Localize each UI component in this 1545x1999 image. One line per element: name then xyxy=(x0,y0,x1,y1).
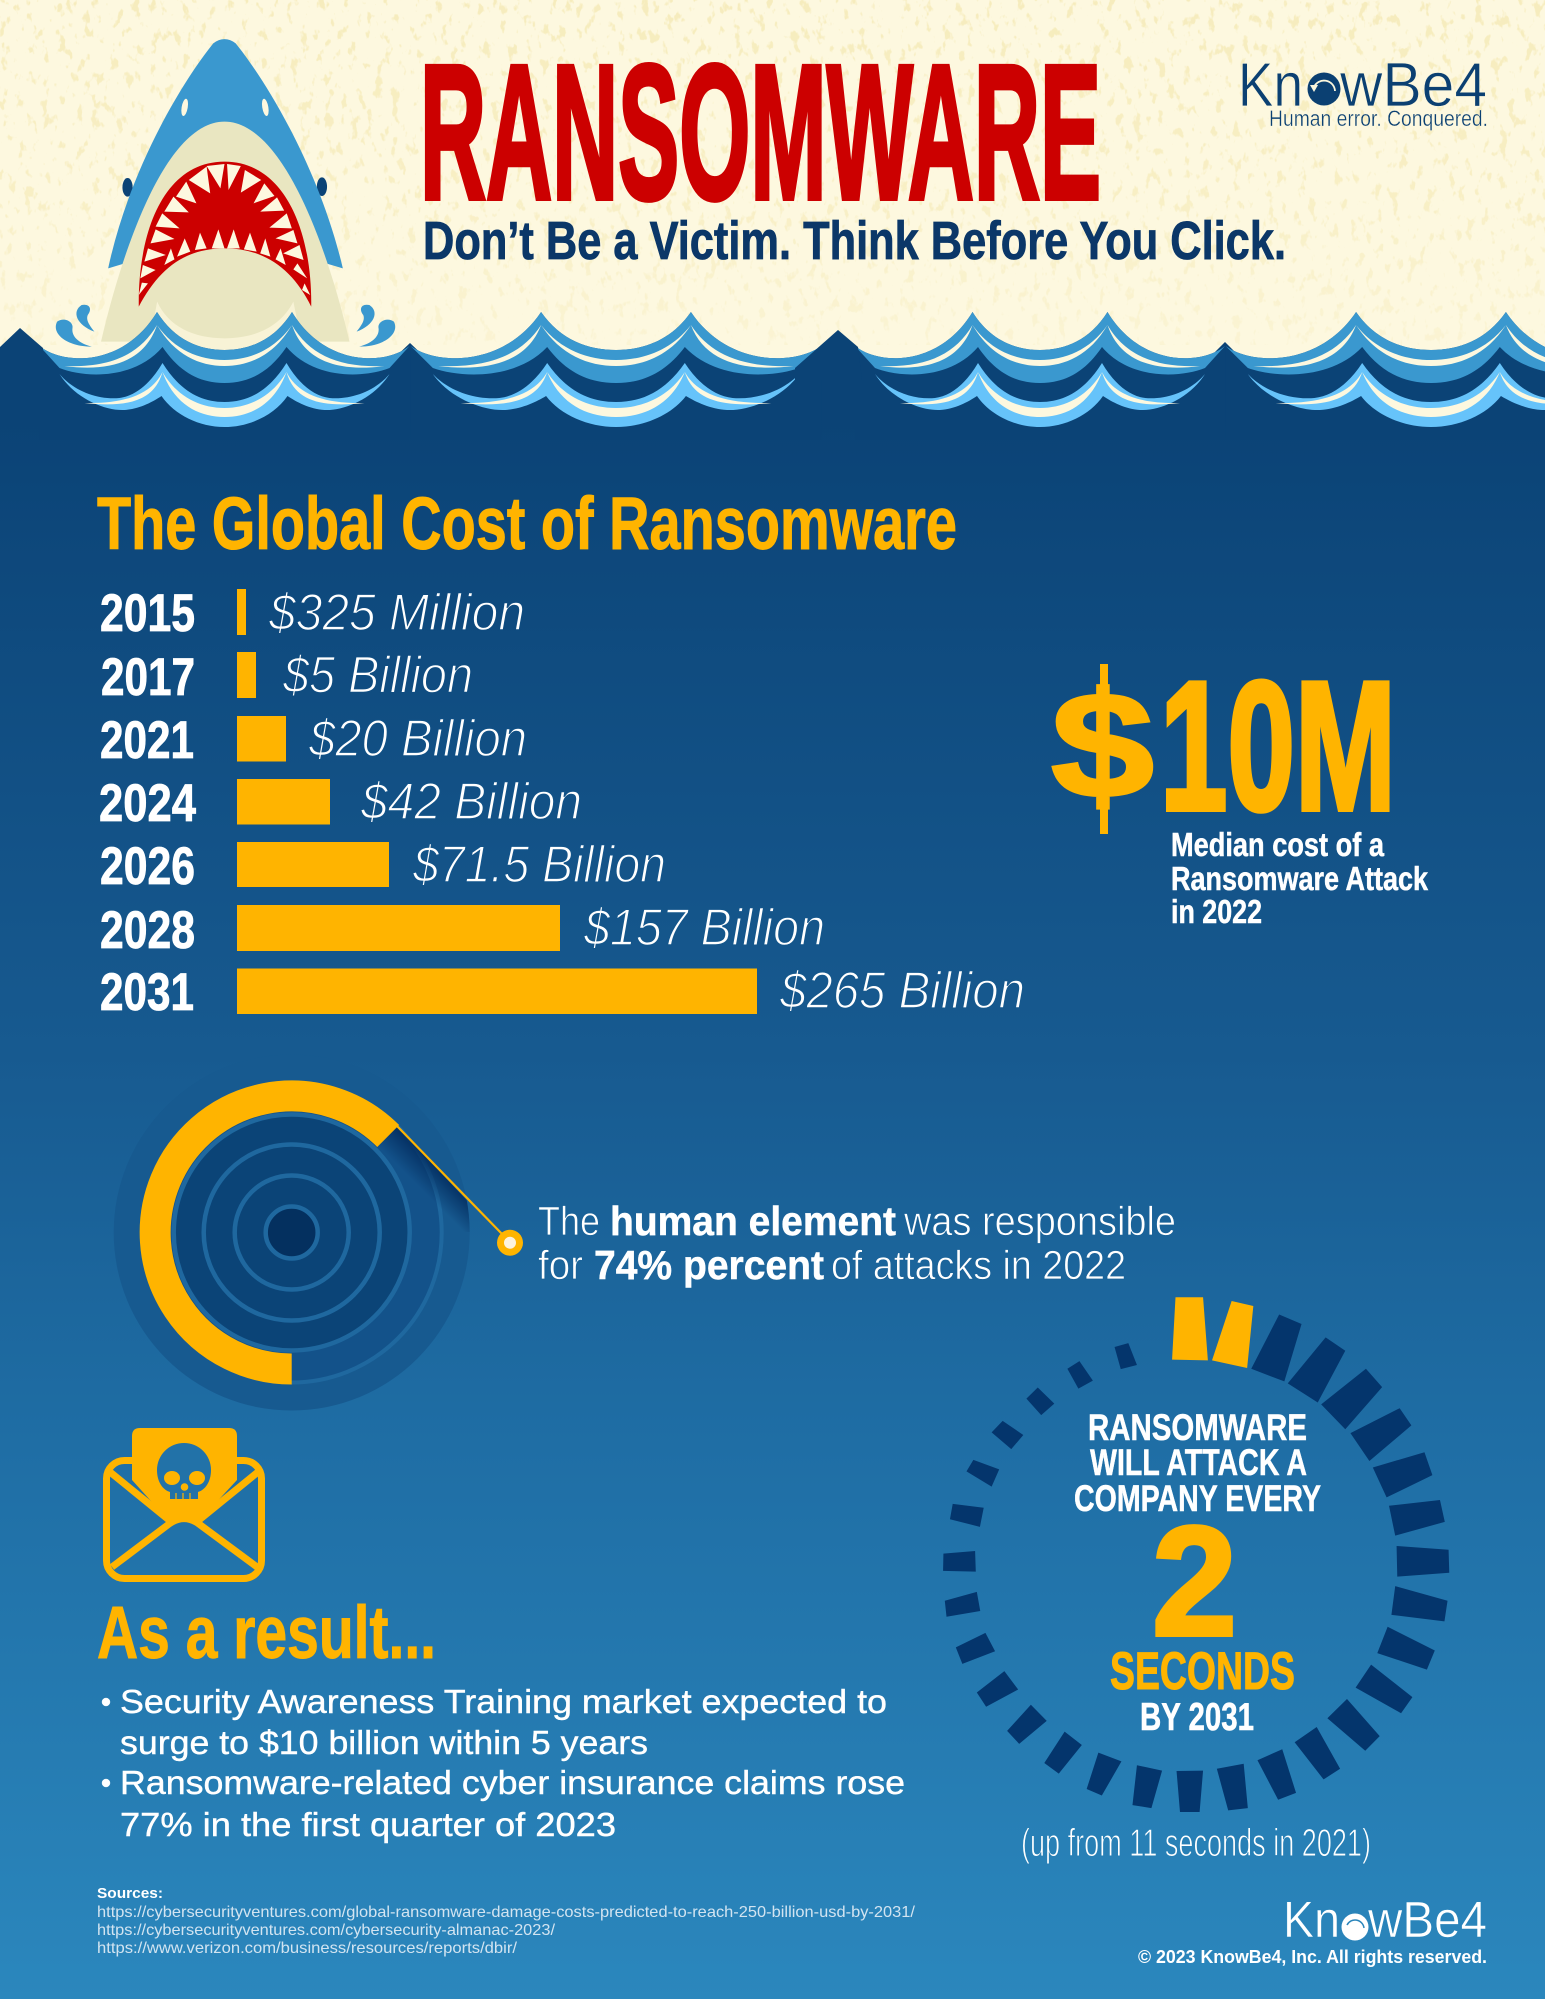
waves: ocean surface xyxy=(0,312,1545,440)
chart: 74% human element target donut xyxy=(114,1054,523,1410)
callout: human element text xyxy=(538,1198,1176,1288)
logo: KnowBe4 header: Human error. Conquered. xyxy=(1269,106,1488,131)
logo: KnowBe4 footer xyxy=(1283,1891,1487,1948)
row 2024 xyxy=(99,773,582,833)
text: up from 11 seconds: (up from 11 seconds in 2021) xyxy=(1021,1822,1371,1865)
bullet list: results: Ransomware-related cyber insurance claims rose xyxy=(120,1764,905,1801)
row 2024: $42 Billion xyxy=(360,773,582,831)
row 2028: 2028 xyxy=(100,901,195,960)
row 2026: 2026 xyxy=(100,837,195,896)
stat: $10M median cost: $ xyxy=(1051,661,1154,829)
row 2031 xyxy=(100,962,1025,1022)
stat caption: in 2022 xyxy=(1171,893,1262,930)
illustration: shark xyxy=(56,39,395,352)
stat: $10M median cost xyxy=(1051,642,1396,848)
sources: https://www.verizon.com/business/resources/reports/dbir/ xyxy=(97,1940,518,1957)
callout: human element text: for xyxy=(538,1242,583,1288)
stat caption: Median cost of a xyxy=(1171,826,1385,863)
bullet list: results xyxy=(102,1683,905,1843)
row 2028 xyxy=(100,899,825,960)
stat caption xyxy=(1171,826,1429,930)
row 2021: $20 Billion xyxy=(308,710,527,768)
callout: human element text: human element xyxy=(610,1198,896,1244)
bullet list: results: Security Awareness Training market expected to xyxy=(120,1683,887,1720)
text: by 2031: BY 2031 xyxy=(1140,1696,1254,1739)
row 2026: $71.5 Billion xyxy=(412,836,666,894)
bullet list: results: surge to $10 billion within 5 years xyxy=(120,1724,648,1761)
logo: KnowBe4 header: wBe4 xyxy=(1339,51,1487,120)
bar chart: global cost by year xyxy=(99,584,1025,1022)
sources: Sources: xyxy=(97,1885,163,1902)
row 2017: 2017 xyxy=(101,648,195,707)
row 2021: 2021 xyxy=(100,711,194,770)
heading: global cost: The Global Cost of Ransomware xyxy=(97,482,957,565)
number: 2: 2 xyxy=(1152,1495,1237,1669)
logo: KnowBe4 header xyxy=(1238,51,1488,131)
sources: https://cybersecurityventures.com/cybersecurity-almanac-2023/ xyxy=(97,1922,556,1939)
row 2017 xyxy=(101,646,473,707)
logo: KnowBe4 footer: Kn xyxy=(1283,1891,1340,1948)
stat caption: Ransomware Attack xyxy=(1171,860,1429,897)
row 2015: 2015 xyxy=(100,584,195,643)
callout: human element text: 74% percent xyxy=(594,1242,824,1288)
row 2024: 2024 xyxy=(99,774,196,833)
row 2017: $5 Billion xyxy=(282,646,473,704)
callout: human element text: The xyxy=(538,1198,600,1244)
row 2026 xyxy=(100,836,666,896)
sources: https://cybersecurityventures.com/global-ransomware-damage-costs-predicted-to-reach-250-billion-usd-by-2031/ xyxy=(97,1904,916,1921)
text: seconds: SECONDS xyxy=(1110,1642,1295,1701)
background: cream sand xyxy=(0,0,1545,440)
copyright: © 2023 KnowBe4, Inc. All rights reserved. xyxy=(1138,1947,1487,1967)
heading: as a result: As a result... xyxy=(97,1591,436,1674)
logo: KnowBe4 header: Kn xyxy=(1238,51,1303,120)
icon: envelope with skull letter xyxy=(106,1428,262,1578)
text: ransomware will attack: COMPANY EVERY xyxy=(1074,1478,1321,1519)
text: ransomware will attack: RANSOMWARE xyxy=(1088,1407,1307,1448)
row 2015: $325 Million xyxy=(268,584,525,642)
callout: human element text: of attacks in 2022 xyxy=(831,1242,1126,1288)
bullet list: results: 77% in the first quarter of 2023 xyxy=(120,1806,616,1843)
text: ransomware will attack xyxy=(1074,1407,1321,1519)
sources xyxy=(97,1885,916,1957)
background: sand speckle texture xyxy=(0,0,1545,345)
chart: countdown tick ring xyxy=(943,1297,1449,1812)
logo: KnowBe4 footer: wBe4 xyxy=(1367,1891,1487,1948)
row 2015 xyxy=(100,584,525,643)
callout: human element text: was responsible xyxy=(903,1198,1176,1244)
subtitle: Don’t Be a Victim. Think Before You Click. xyxy=(423,211,1286,271)
row 2028: $157 Billion xyxy=(583,899,825,957)
row 2021 xyxy=(100,710,527,770)
row 2031: $265 Billion xyxy=(779,962,1025,1020)
row 2031: 2031 xyxy=(100,963,194,1022)
text: ransomware will attack: WILL ATTACK A xyxy=(1090,1442,1307,1483)
stat: $10M median cost: 10M xyxy=(1160,642,1396,848)
